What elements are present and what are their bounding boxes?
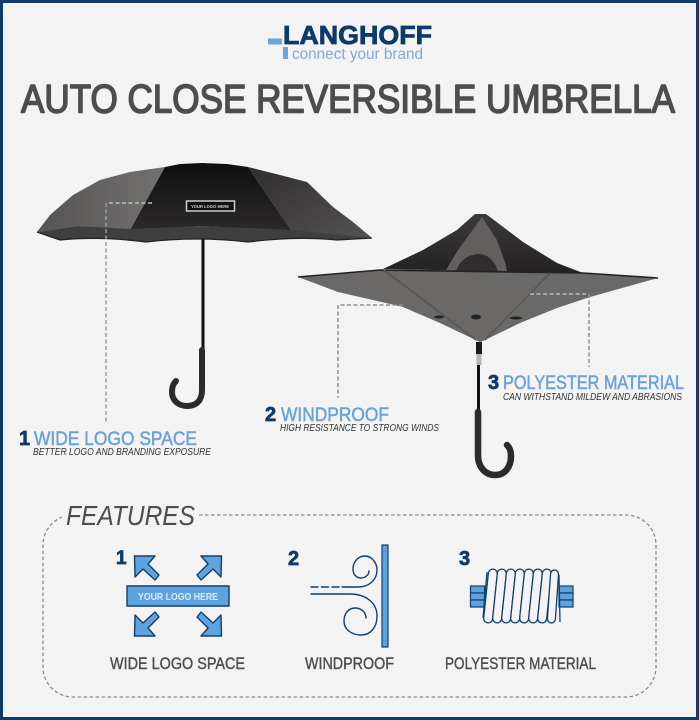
callout 1: wide logo space	[19, 428, 212, 458]
label: wide logo space: WIDE LOGO SPACE	[110, 654, 245, 673]
icon: wide logo space: 1	[116, 548, 127, 569]
logo: Langhoff	[268, 20, 432, 63]
callout 2: windproof: 2	[265, 404, 276, 426]
icon: wide logo space	[116, 548, 229, 636]
callout 3: polyester material: 3	[488, 372, 499, 394]
umbrella 1: closed-side view	[37, 163, 372, 406]
heading: features: FEATURES	[66, 500, 195, 531]
callout 1: wide logo space: BETTER LOGO AND BRANDING EXPOSURE	[33, 446, 212, 458]
icon: polyester material	[459, 548, 573, 623]
icon: polyester material: 3	[459, 548, 470, 570]
label: windproof: WINDPROOF	[305, 654, 394, 673]
dashed leader line 3	[530, 294, 589, 367]
label: polyester material: POLYESTER MATERIAL	[445, 654, 596, 673]
callout 1: wide logo space: WIDE LOGO SPACE	[34, 428, 197, 450]
panel: features	[43, 500, 656, 697]
icon: windproof: 2	[288, 548, 299, 570]
umbrella 2: inverted view	[298, 214, 658, 475]
callout 2: windproof	[265, 404, 439, 434]
umbrella 1: closed-side view: YOUR LOGO HERE	[191, 204, 229, 209]
callout 2: windproof: WINDPROOF	[281, 404, 389, 426]
logo: Langhoff: LANGHOFF	[283, 20, 432, 50]
dashed leader line 2	[338, 305, 403, 398]
callout 3: polyester material	[488, 372, 684, 403]
dashed leader line 1	[106, 203, 152, 423]
icon: wide logo space: YOUR LOGO HERE	[138, 591, 218, 603]
logo: Langhoff: connect your brand	[292, 46, 423, 63]
callout 1: wide logo space: 1	[19, 428, 30, 450]
icon: windproof	[288, 545, 388, 647]
callout 2: windproof: HIGH RESISTANCE TO STRONG WINDS	[280, 422, 439, 434]
